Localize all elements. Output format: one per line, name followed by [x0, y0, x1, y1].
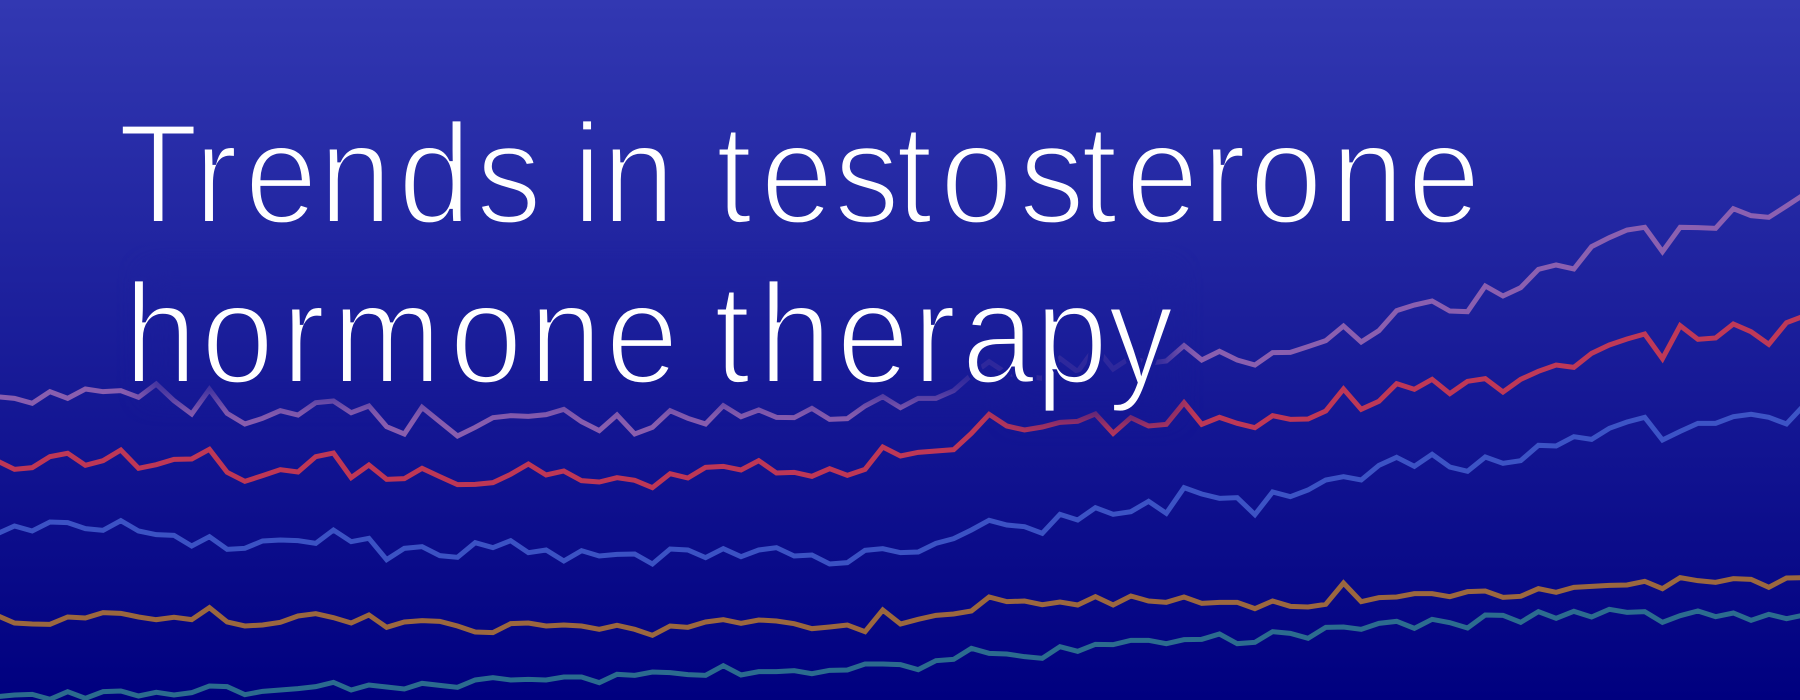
trend line: purple [0, 194, 1800, 436]
title [118, 95, 1481, 414]
trend line: teal [0, 609, 1800, 699]
line chart: five trend lines [0, 194, 1800, 699]
title line 1: Trends in testosterone [118, 95, 1481, 254]
trend line: orange [0, 578, 1800, 635]
title line 2: hormone therapy [124, 255, 1174, 414]
soft glow behind title [145, 270, 1175, 418]
trend line: blue [0, 405, 1800, 564]
trend line: red [0, 316, 1800, 488]
